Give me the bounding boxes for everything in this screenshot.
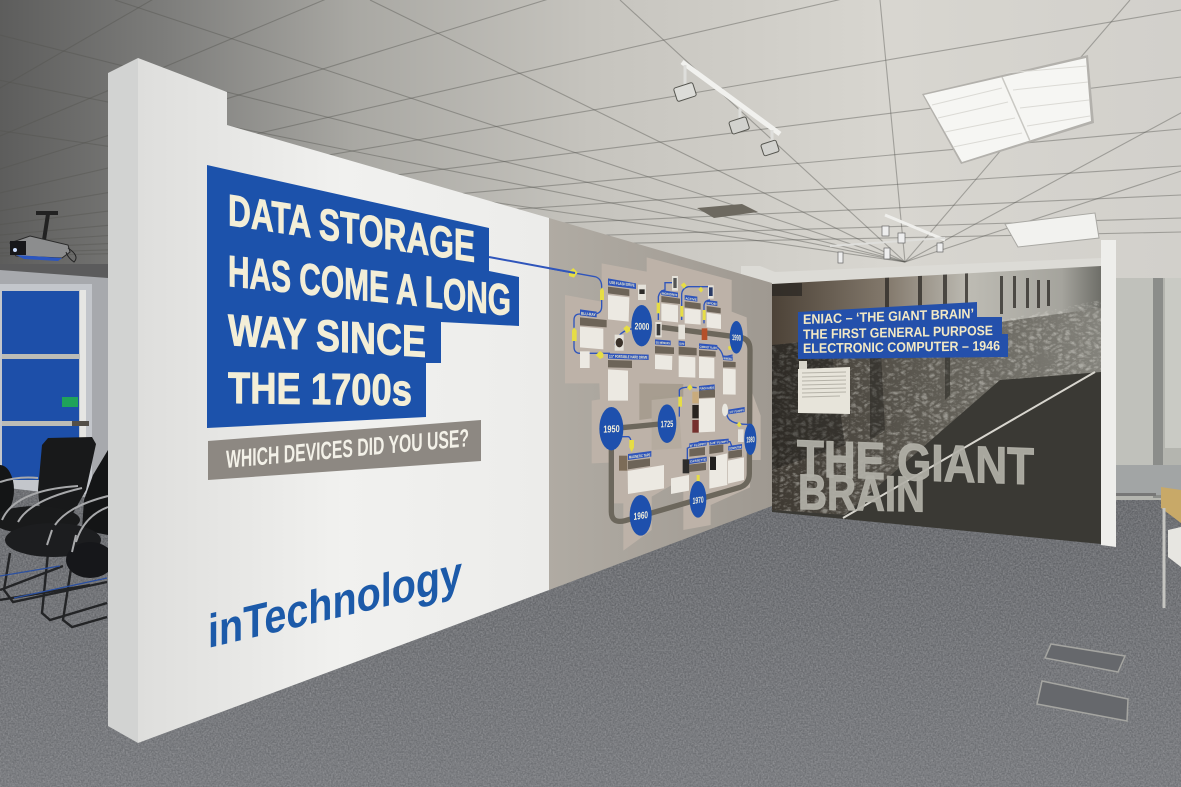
white end column: [1101, 240, 1116, 547]
connector from heading to timeline: [489, 257, 575, 273]
device labels: MICRODRIVE: [662, 291, 677, 297]
ceiling light panel: near: [922, 55, 1094, 164]
inTechnology logo: inTechnology: [208, 547, 462, 659]
floor access hatches: [1037, 644, 1128, 721]
taupe timeline wall: [549, 218, 772, 590]
darker cut-outs: [639, 383, 683, 450]
ENIAC banner: ENIAC – ‘THE GIANT BRAIN’: [803, 306, 974, 327]
marker: 1950: [599, 407, 623, 450]
marker: 1990: [730, 321, 743, 354]
marker: 1960: [630, 495, 652, 536]
patch cable texture: [772, 300, 1102, 520]
device labels: 8" FLOPPY: [690, 442, 706, 448]
marker: 1950: 1950: [603, 424, 620, 436]
main heading: WAY SINCE: [228, 305, 426, 366]
chair backs: [38, 437, 96, 515]
marker: 1960: 1960: [634, 510, 648, 523]
heading: The Giant Brain: [797, 430, 1034, 523]
device labels: 3.5" FLOPPY: [729, 408, 744, 414]
device labels: [580, 278, 745, 464]
ceiling light panel: far: [1005, 213, 1099, 247]
subheading banner: [208, 420, 481, 480]
track spotlights: far: [830, 215, 945, 263]
device labels: USB FLASH DRIVE: [609, 280, 635, 288]
marker: 1990: 1990: [732, 332, 741, 343]
device labels: PUNCH CARDS: [700, 386, 714, 391]
white feature wall: [108, 58, 549, 743]
machine bank: [772, 265, 1101, 515]
blue door: [0, 284, 92, 494]
main heading: DATA STORAGE: [228, 185, 475, 272]
device labels: DVD: [679, 342, 685, 346]
main heading: [207, 165, 519, 428]
info cards: [580, 295, 744, 494]
chair seats: [0, 465, 14, 515]
main heading: THE 1700s: [228, 363, 412, 415]
device labels: 5.25" FLOPPY: [710, 440, 728, 445]
marker: 1970: 1970: [693, 494, 704, 506]
ceiling: [0, 0, 1181, 300]
chair frames: [0, 533, 107, 627]
main heading: HAS COME A LONG: [228, 246, 511, 325]
ENIAC banner: THE FIRST GENERAL PURPOSE: [803, 323, 993, 342]
device labels: IPOD: [707, 301, 718, 306]
desk at right edge: [1161, 487, 1181, 608]
wall cabinets: [772, 265, 1101, 345]
device thumbnails: [580, 276, 744, 473]
ENIAC banner: [798, 302, 1008, 359]
mural photo base: [772, 265, 1101, 544]
marker: 1725: 1725: [661, 419, 673, 429]
subheading banner: WHICH DEVICES DID YOU USE?: [226, 424, 469, 474]
right glass partition: [1116, 278, 1181, 500]
marker: 2000: 2000: [635, 321, 649, 333]
blue connector lines: [548, 268, 750, 470]
cabinet divisions: [772, 270, 1050, 318]
air vent: [697, 204, 758, 218]
marker: 1970: [690, 481, 706, 518]
marker: 2000: [631, 305, 652, 346]
storage timeline: [548, 257, 761, 551]
ENIAC banner: ELECTRONIC COMPUTER – 1946: [803, 338, 1000, 356]
device labels: COMPACT FLASH: [700, 345, 717, 350]
heading: The Giant Brain: BRAIN: [798, 464, 925, 523]
track spotlights: near: [673, 62, 780, 156]
device labels: CASSETTE: [690, 457, 706, 464]
dark caption strips: [580, 287, 742, 472]
white floor cable: [843, 372, 1095, 518]
left room behind wall: [0, 264, 108, 520]
back wall: ENIAC photo mural: [772, 265, 1102, 544]
heading: The Giant Brain: THE GIANT: [797, 430, 1034, 496]
yellow arrows: [569, 268, 742, 486]
black leather chairs: [0, 437, 114, 627]
device labels: MINIDISC: [724, 356, 733, 361]
projector: [10, 213, 76, 262]
device labels: ACTIVE: [685, 296, 697, 302]
marker: 1980: [744, 424, 756, 455]
ENIAC info card: [798, 361, 850, 414]
device labels: MAGNETIC TAPE: [629, 452, 651, 460]
marker: 1725: [658, 404, 676, 443]
ceiling soffit: [741, 258, 1101, 284]
chrome arms: [0, 478, 108, 552]
device labels: 3.5" PORTABLE HARD DRIVE: [609, 354, 648, 360]
device labels: BLU-RAY: [581, 311, 596, 317]
machine shadow bands: [772, 326, 950, 470]
era markers: [599, 305, 756, 536]
device labels: SD MEMORY: [656, 340, 670, 345]
floor carpet: [0, 480, 1181, 787]
timeline track: [611, 327, 750, 521]
device labels: COMPUTER: [729, 445, 742, 451]
lighter backing shapes: [565, 257, 761, 551]
marker: 1980: 1980: [746, 434, 755, 445]
